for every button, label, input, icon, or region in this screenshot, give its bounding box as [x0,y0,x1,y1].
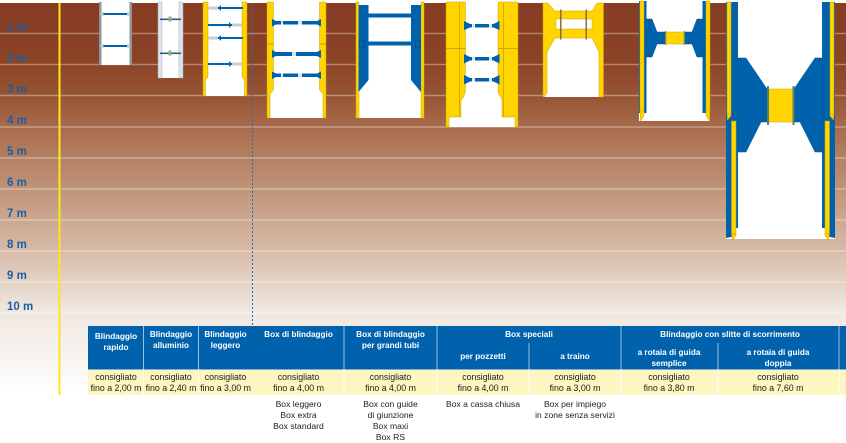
table header row: doppia [765,359,792,368]
table depth row: consigliato [462,372,504,382]
yellow vertical axis [58,3,60,395]
table header row: rapido [103,343,129,352]
notes below table: Box per impiego [544,399,606,409]
diagram: blindaggio leggero [203,2,247,96]
diagram: box di blindaggio [267,2,326,118]
table depth row: consigliato [554,372,596,382]
table depth row: fino a 3,00 m [200,383,251,393]
depth scale labels: 7 m [7,208,27,220]
table depth row: fino a 4,00 m [458,383,508,393]
blue dotted divider [252,3,254,395]
notes below table: Box leggero [276,399,322,409]
depth scale labels: 4 m [7,115,27,127]
table header row [88,326,846,370]
notes below table: in zone senza servizi [535,410,615,420]
table depth row [88,370,846,395]
diagram: slitta a rotaia doppia [726,0,835,240]
depth scale labels [7,22,33,313]
table header row: Box di blindaggio [264,330,333,339]
table depth row: fino a 2,40 m [146,383,196,393]
table depth row: consigliato [757,372,799,382]
table depth row: fino a 2,00 m [91,383,141,393]
notes below table: Box RS [376,432,405,442]
table header row: alluminio [153,341,189,350]
depth scale labels: 8 m [7,239,27,251]
table depth row: fino a 3,80 m [644,383,694,393]
table depth row: consigliato [150,372,192,382]
notes below table: Box con guide [363,399,418,409]
table header row: Blindaggio [204,330,247,339]
notes below table: Box standard [273,421,324,431]
table depth row: consigliato [205,372,246,382]
notes below table [273,399,615,442]
notes below table: Box maxi [373,421,408,431]
table header row: Blindaggio con slitte di scorrimento [660,330,800,339]
table header row: Blindaggio [150,330,192,339]
table depth row: fino a 4,00 m [273,383,324,393]
table depth row: fino a 7,60 m [753,383,803,393]
table depth row: consigliato [648,372,690,382]
depth scale labels: 1 m [7,22,27,34]
diagram: box speciale a traino [543,3,604,97]
notes below table: Box extra [280,410,317,420]
table header row: a rotaia di guida [638,348,701,357]
depth scale labels: 3 m [7,84,27,96]
table depth row: fino a 4,00 m [365,383,416,393]
table header row: leggero [211,341,240,350]
notes below table: Box a cassa chiusa [446,399,520,409]
table depth row: consigliato [95,372,137,382]
table header row: semplice [651,359,687,368]
table depth row: fino a 3,00 m [550,383,600,393]
table header row: per grandi tubi [362,341,419,350]
table depth row: consigliato [370,372,411,382]
table header row: a traino [560,352,590,361]
depth scale labels: 2 m [7,53,27,65]
table header row: a rotaia di guida [747,348,810,357]
notes below table: di giunzione [368,410,414,420]
diagram: slitta a rotaia semplice [639,0,710,121]
table header row: Box di blindaggio [356,330,425,339]
depth scale labels: 5 m [7,146,27,158]
diagram: box per grandi tubi [356,2,424,118]
diagram: blindaggio rapido [99,0,132,65]
depth scale labels: 10 m [7,301,33,313]
table depth row: consigliato [278,372,319,382]
diagram: blindaggio alluminio [158,0,183,78]
table header row: per pozzetti [460,352,506,361]
diagram: box speciale per pozzetti [446,2,518,127]
depth scale labels: 6 m [7,177,27,189]
depth scale labels: 9 m [7,270,27,282]
table header row: Box speciali [505,330,553,339]
table header row: Blindaggio [95,332,137,341]
